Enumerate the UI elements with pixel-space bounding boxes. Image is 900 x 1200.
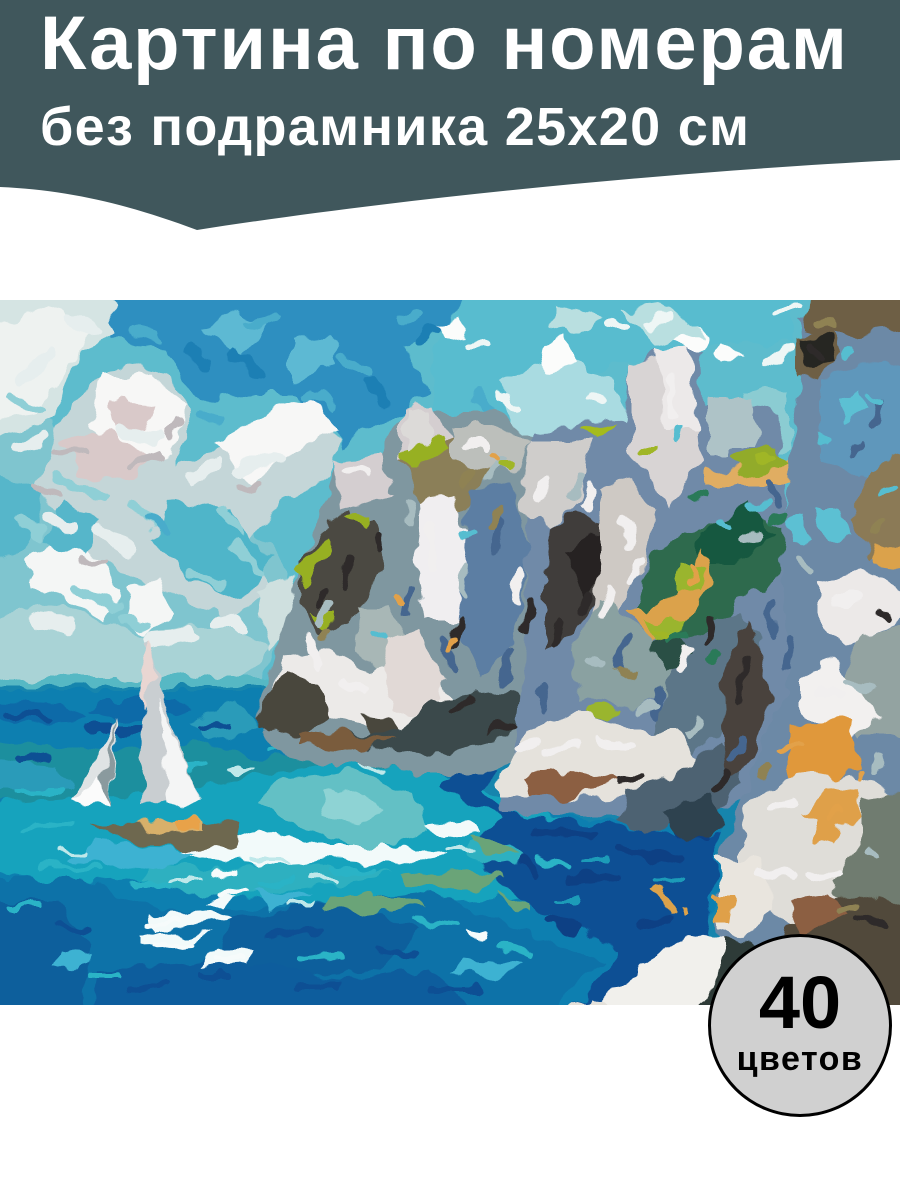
- badge: 40 colors: [708, 934, 892, 1117]
- subtitle: без подрамника 25х20 см: [40, 97, 750, 157]
- sky brush dabs: [10, 305, 795, 640]
- title: Картина по номерам: [40, 1, 849, 86]
- right cliff: [550, 280, 900, 1025]
- badge label: цветов: [737, 1040, 863, 1078]
- badge number: 40: [759, 961, 841, 1044]
- sailboat: [72, 640, 242, 852]
- left cliff: [255, 405, 700, 775]
- sea: [0, 678, 760, 1025]
- center cliff and towers: [495, 350, 795, 840]
- painting: sea cliffs and sailboat: [0, 300, 900, 1005]
- header banner: [0, 0, 900, 230]
- cliff brush dabs: [310, 320, 890, 970]
- sea wave dabs: [10, 715, 705, 990]
- sky: [0, 280, 900, 700]
